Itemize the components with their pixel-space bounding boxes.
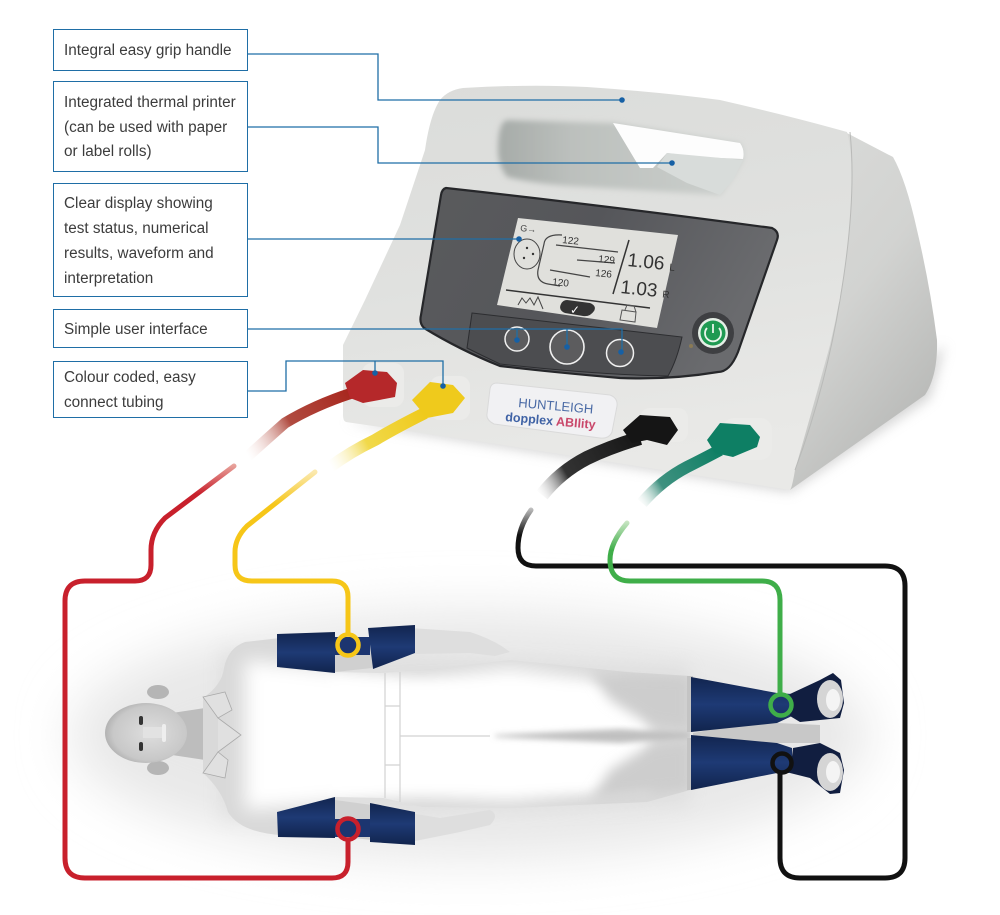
black connection line and ankle marker <box>518 510 905 878</box>
forearm between lower cuffs <box>335 800 372 840</box>
red connection line and arm marker <box>65 466 358 878</box>
callout: colour coded tubing: Colour coded, easy <box>64 369 196 386</box>
head and ears <box>105 685 215 775</box>
tube sockets <box>362 363 772 460</box>
callout: clear display <box>54 184 522 296</box>
device shadow <box>345 345 945 492</box>
callout: integrated thermal printer <box>54 82 675 172</box>
callout: clear display: interpretation <box>64 270 153 287</box>
LCD display: 129 <box>598 254 616 267</box>
bottom arm and hand <box>410 810 495 842</box>
power button <box>689 312 734 354</box>
LCD display: 122 <box>562 235 580 248</box>
top arm and hand <box>410 628 510 656</box>
belt and trouser detail <box>385 672 490 802</box>
control panel <box>420 188 778 378</box>
callout: integral easy grip handle: Integral easy grip handle <box>64 42 232 59</box>
callout: clear display: results, waveform and <box>64 245 214 262</box>
callout: colour coded tubing <box>54 361 446 418</box>
thermal printer <box>657 153 743 195</box>
trouser hems <box>687 676 693 790</box>
brand label plate: dopplex ABIlity <box>505 410 596 432</box>
callout: integrated thermal printer: Integrated thermal printer <box>64 94 236 111</box>
callout: integral easy grip handle <box>54 30 625 103</box>
forearm between upper cuffs <box>335 640 372 672</box>
LCD display: 120 <box>552 277 570 290</box>
LCD display: G→ <box>520 223 537 235</box>
black tube from device <box>542 415 678 495</box>
LCD display: 1.03 R <box>619 277 671 303</box>
LCD display: 1.06 L <box>626 250 677 276</box>
callout: simple user interface: Simple user interface <box>64 321 208 338</box>
green connection line and ankle marker <box>610 523 792 716</box>
green tube from device <box>642 423 760 503</box>
background shading behind patient <box>70 610 870 860</box>
callout: clear display: Clear display showing <box>64 195 213 212</box>
device: Dopplex ABIlity unit <box>343 86 945 492</box>
LCD display: 126 <box>595 268 613 281</box>
LCD display <box>497 218 678 328</box>
handle opening <box>498 120 744 195</box>
patient shadow <box>220 650 690 820</box>
callout: clear display: test status, numerical <box>64 220 209 237</box>
callout: integrated thermal printer: (can be used with paper <box>64 119 227 136</box>
yellow connection line and arm marker <box>235 472 358 656</box>
callout: colour coded tubing: connect tubing <box>64 394 164 411</box>
leg cuffs <box>691 677 792 790</box>
yellow tube from device <box>330 382 465 467</box>
brand label plate: HUNTLEIGH <box>518 395 594 417</box>
LCD display: ✓ <box>570 303 580 317</box>
callout: integrated thermal printer: or label rolls) <box>64 143 152 160</box>
patient figure <box>105 625 844 845</box>
device side panel <box>770 132 937 490</box>
device seam line <box>795 132 852 470</box>
callout: simple user interface <box>54 310 624 355</box>
handle through-hole <box>613 123 744 168</box>
arm cuffs <box>277 625 415 845</box>
shirt and trousers <box>200 630 700 840</box>
collar <box>203 692 241 778</box>
red tube from device <box>248 370 397 456</box>
gap between ankles <box>693 723 820 743</box>
feet <box>790 673 844 794</box>
user interface bar with buttons <box>467 313 682 376</box>
device front body <box>343 86 852 490</box>
brand label plate <box>487 383 617 438</box>
